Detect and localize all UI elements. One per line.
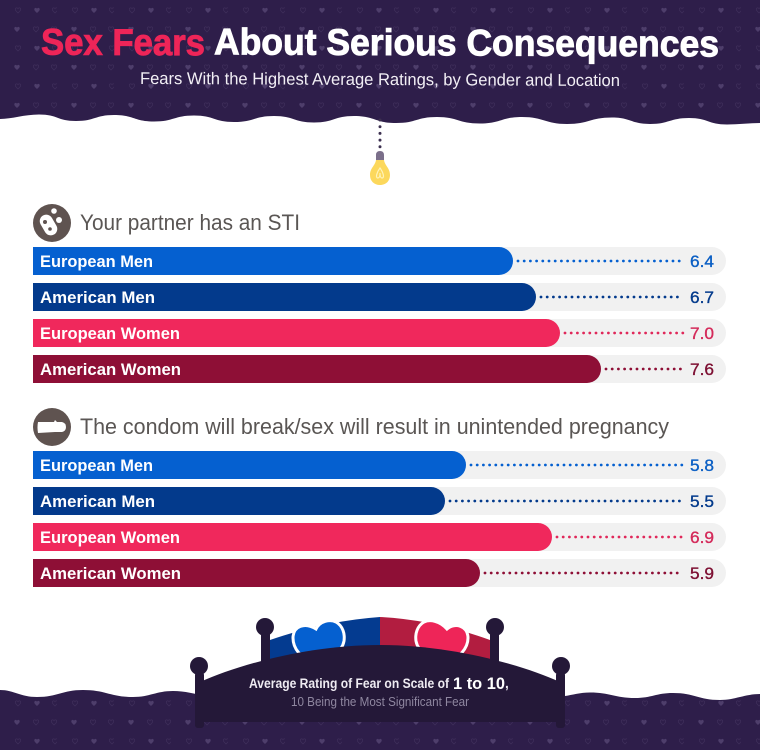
illustration: bed with two hearts [190,617,570,728]
bar: American Men 6.7: 6.7 [690,289,714,307]
bar: European Women 6.9: European Women [40,528,180,547]
caption: rating scale [249,674,509,709]
header banner [0,0,760,124]
bar: European Women 7.0 [33,319,726,347]
bar: American Men 6.7: American Men [40,288,155,307]
bar: American Women 5.9: 5.9 [690,565,714,583]
bar: American Women 7.6: 7.6 [690,361,714,379]
heading: condom: The condom will break/sex will result in unintended pregnancy [80,414,669,439]
bar: European Women 7.0: 7.0 [690,325,714,343]
caption: rating scale: Average Rating of Fear on Scale of [249,676,449,691]
bar: European Women 7.0: European Women [40,324,180,343]
bar: American Women 5.9: American Women [40,564,181,583]
bar: American Women 5.9 [33,559,726,587]
footer banner [0,690,760,750]
caption: rating scale: , [505,676,509,691]
panel: your partner has an STI [33,204,726,383]
bar: American Men 6.7 [33,283,726,311]
bar: European Women 6.9: 6.9 [690,529,714,547]
heading: condom [33,408,669,446]
bar: American Men 5.5: American Men [40,492,155,511]
icon: blue heart [293,621,344,664]
bar: European Men 5.8: 5.8 [690,457,714,475]
icon: condom [33,408,71,446]
bar: American Women 7.6 [33,355,726,383]
panel: condom break / pregnancy [33,408,726,587]
title: About Serious Consequences [214,21,719,64]
bar: American Men 5.5: 5.5 [690,493,714,511]
headboard: blue and red arc [270,617,490,660]
heading: STI: Your partner has an STI [80,210,300,235]
bar: European Women 6.9 [33,523,726,551]
icon: pink heart [416,621,468,664]
heading: STI [33,204,300,242]
icon: STI germs [33,204,71,242]
bar: European Men 6.4: 6.4 [690,253,714,271]
subtitle: Fears With the Highest Average Ratings, by Gender and Location [140,69,620,90]
bed frame [190,618,570,728]
bar: European Men 5.8 [33,451,726,479]
title: Sex Fears [41,22,205,63]
bar: American Men 5.5 [33,487,726,515]
bar: European Men 5.8: European Men [40,456,153,475]
title [41,21,719,65]
bar: European Men 6.4 [33,247,726,275]
bar: European Men 6.4: European Men [40,252,153,271]
bar: American Women 7.6: American Women [40,360,181,379]
caption: rating scale: 1 to 10 [453,674,505,693]
caption: rating scale: 10 Being the Most Significant Fear [291,695,469,709]
icon: light bulb [370,120,390,185]
